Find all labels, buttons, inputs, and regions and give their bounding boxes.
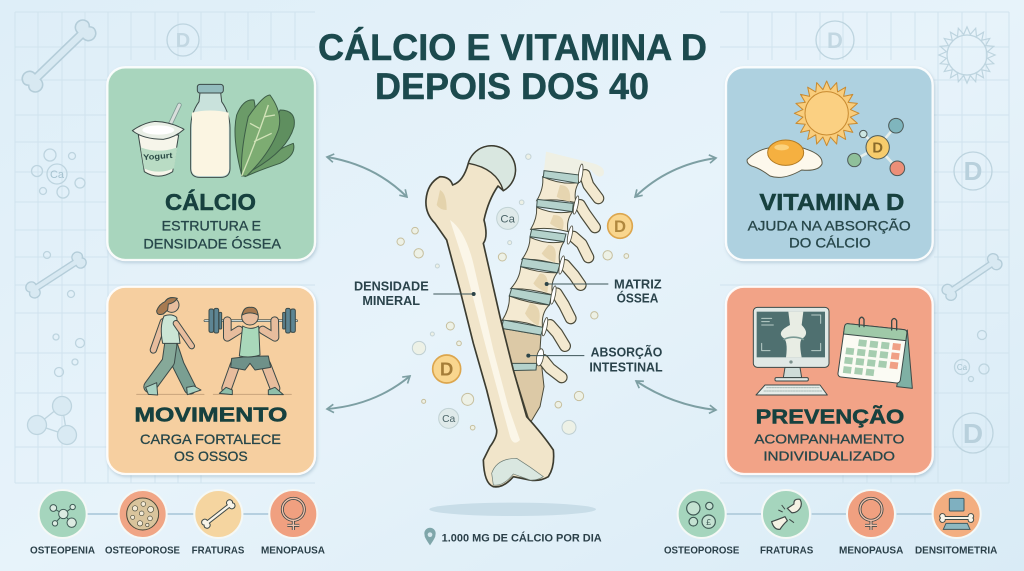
icon: osteoporose xyxy=(664,490,739,556)
panel: vitamina d xyxy=(726,67,933,260)
icon: bone scan monitor xyxy=(753,307,829,395)
icon: sun inner ring xyxy=(947,35,987,75)
label: matriz óssea: ÓSSEA xyxy=(617,291,658,306)
icon: triangle molecule xyxy=(28,396,76,444)
icon: calcium bubbles right xyxy=(954,330,989,382)
vitamin D coin upper xyxy=(608,214,632,238)
vitamin D coin upper: D xyxy=(614,217,626,236)
icon: osteopenia: OSTEOPENIA xyxy=(30,545,96,556)
panel: movimento xyxy=(107,287,315,474)
label: absorção intestinal: INTESTINAL xyxy=(589,361,663,375)
label: densidade mineral xyxy=(354,280,476,308)
calcium bubble upper xyxy=(497,207,519,229)
text: carga fortalece os ossos: OS OSSOS xyxy=(174,448,248,464)
icon: osteoporose: OSTEOPOROSE xyxy=(105,545,180,556)
icon: woman walking xyxy=(137,298,291,395)
arrow: movimento to bone xyxy=(327,376,410,409)
central illustration: femur and spine xyxy=(354,146,663,487)
icon: fraturas: FRATURAS xyxy=(192,545,244,556)
icon: calendar xyxy=(838,317,912,388)
text: estrutura e densidade: ESTRUTURA E xyxy=(162,218,261,234)
icon: background bone top left xyxy=(19,17,99,95)
text: daily calcium: 1.000 MG DE CÁLCIO POR DIA xyxy=(442,532,602,545)
icon: densitometria xyxy=(915,490,998,556)
vitamin D coin lower: D xyxy=(440,359,453,380)
label: absorção intestinal: ABSORÇÃO xyxy=(591,345,662,360)
bottom centre: shadow and daily calcium note xyxy=(424,503,602,545)
icon: menopausa: MENOPAUSA xyxy=(839,545,904,556)
icon: calcium bubbles right: Ca xyxy=(957,363,968,372)
decorative icons: left and right columns xyxy=(19,17,1004,453)
femur xyxy=(426,146,554,487)
icon: vitamin D badge top left: D xyxy=(176,30,190,52)
icon: densitometria: DENSITOMETRIA xyxy=(915,545,998,556)
icon: vitamin D badge right xyxy=(954,152,992,190)
bubbles xyxy=(397,154,629,434)
calcium bubble upper: Ca xyxy=(500,213,516,225)
panel: prevenção xyxy=(726,287,933,474)
icon: vitamin D badge top right xyxy=(816,21,854,59)
icon: fried egg xyxy=(747,140,822,177)
icon: osteopenia xyxy=(30,490,96,556)
title xyxy=(318,27,707,107)
title: CÁLCIO E VITAMINA D xyxy=(318,27,707,68)
icon: sun xyxy=(794,81,859,146)
icon: background bubbles xyxy=(44,252,84,376)
icon: calcium molecule: Ca xyxy=(50,169,65,181)
icon: background bone middle left xyxy=(24,250,88,300)
vitamin D coin lower xyxy=(433,355,461,383)
text: ajuda na absorção: AJUDA NA ABSORÇÃO xyxy=(748,218,911,234)
icon: vitamin D badge lower right xyxy=(953,413,993,453)
heading: cálcio: CÁLCIO xyxy=(165,189,256,215)
text: carga fortalece os ossos: CARGA FORTALECE xyxy=(140,431,281,447)
icon: background bone right xyxy=(940,252,1004,302)
icon: milk bottle xyxy=(191,84,230,177)
text: estrutura e densidade xyxy=(143,218,282,251)
icon: osteoporose: £ xyxy=(706,517,711,527)
icon: fraturas: FRATURAS xyxy=(760,545,813,556)
label: densidade mineral: DENSIDADE xyxy=(354,280,429,294)
icon: man lifting barbell xyxy=(205,307,297,395)
text: ajuda na absorção: DO CÁLCIO xyxy=(789,235,871,251)
text: carga fortalece os ossos xyxy=(140,431,281,464)
icon: yogurt: Yogurt xyxy=(143,151,173,162)
label: densidade mineral: MINERAL xyxy=(362,294,420,308)
arrow: prevenção to bone xyxy=(636,381,716,410)
text: acompanhamento individualizado: INDIVIDUALIZADO xyxy=(763,449,895,464)
heading: vitamina d: VITAMINA D xyxy=(759,189,904,215)
text: acompanhamento individualizado xyxy=(754,431,904,464)
icon: calcium molecule xyxy=(32,149,85,198)
arrow: cálcio to bone xyxy=(327,157,407,197)
icon: fraturas xyxy=(192,490,244,556)
icon: vitamin D molecule xyxy=(848,118,905,176)
calcium bubble lower xyxy=(439,408,459,428)
calcium bubble lower: Ca xyxy=(442,414,456,425)
text: ajuda na absorção xyxy=(748,218,911,251)
bottom left icon row xyxy=(30,490,326,556)
icon: vitamin D badge top right: D xyxy=(827,28,843,53)
heading: movimento: MOVIMENTO xyxy=(134,405,287,427)
icon: location pin xyxy=(424,528,436,545)
icon: fraturas xyxy=(760,490,813,556)
spine xyxy=(502,152,604,423)
icon: menopausa xyxy=(261,490,326,556)
icon: vitamin D badge right: D xyxy=(964,156,982,186)
icon: osteoporose: OSTEOPOROSE xyxy=(664,545,739,556)
icon: yogurt xyxy=(132,105,184,176)
text: estrutura e densidade: DENSIDADE ÓSSEA xyxy=(143,235,282,251)
heading: prevenção: PREVENÇÃO xyxy=(756,405,904,428)
icon: vitamin D molecule: D xyxy=(872,141,883,157)
title: DEPOIS DOS 40 xyxy=(375,66,649,107)
icon: spinach leaves xyxy=(235,95,294,177)
panel: cálcio xyxy=(107,67,315,260)
text: acompanhamento individualizado: ACOMPANHAMENTO xyxy=(754,431,904,446)
label: absorção intestinal xyxy=(526,345,663,375)
icon: menopausa: MENOPAUSA xyxy=(261,545,326,556)
label: matriz óssea xyxy=(545,277,662,306)
label: matriz óssea: MATRIZ xyxy=(614,277,662,291)
icon: vitamin D badge top left xyxy=(167,24,199,56)
icon: background sun xyxy=(939,27,995,83)
icon: vitamin D badge lower right: D xyxy=(963,418,983,449)
arrow: vitamina d to bone xyxy=(635,158,716,197)
icon: menopausa xyxy=(839,490,904,556)
icon: osteoporose xyxy=(105,490,180,556)
bottom right icon row xyxy=(664,490,998,556)
